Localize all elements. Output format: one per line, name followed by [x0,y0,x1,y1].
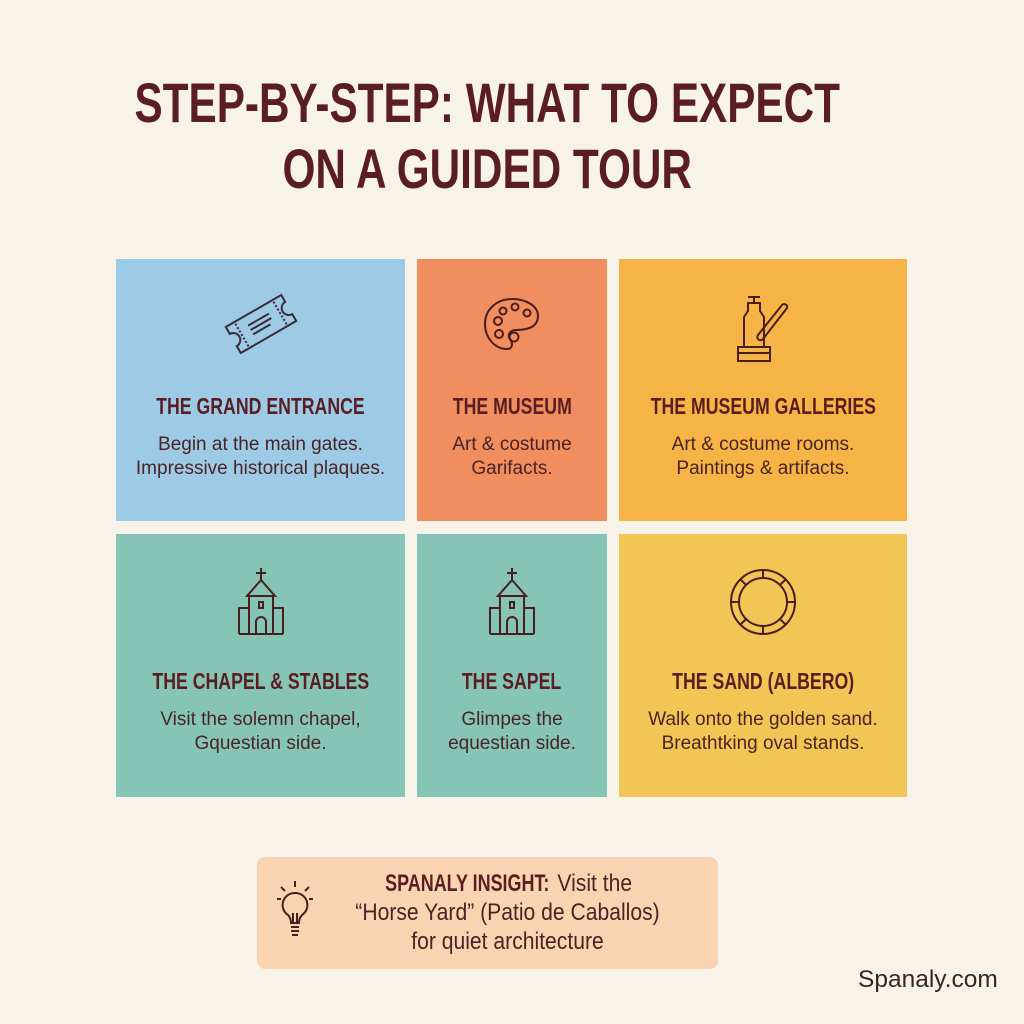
text [355,870,660,955]
title: STEP-BY-STEP: WHAT TO EXPECT [134,71,840,134]
text [648,709,878,754]
text: SPANALY INSIGHT: [385,870,549,897]
text: Visit the [557,870,632,897]
panel: chapel & stables [116,534,405,797]
text: Art & costume [452,434,572,455]
panel: museum galleries [619,259,907,521]
text: Art & costume rooms. [672,434,854,455]
text: Walk onto the golden sand. [648,709,878,730]
icon: paint tube [737,296,788,362]
icon: ticket [224,294,298,354]
text: Visit the solemn chapel, [160,709,361,730]
panel: grand entrance [116,259,405,521]
heading: THE CHAPEL & STABLES [152,668,369,694]
text [672,434,854,479]
text: Garifacts. [471,458,553,479]
heading: THE MUSEUM [452,393,572,419]
icon: chapel [238,568,284,635]
icon: arena ring [730,569,796,635]
text: Gquestian side. [194,733,327,754]
text: for quiet architecture [411,928,604,955]
text [160,709,361,754]
panel: sand [619,534,907,797]
text: “Horse Yard” (Patio de Caballos) [355,899,660,926]
text: Impressive historical plaques. [136,458,385,479]
text [136,434,385,479]
text: Paintings & artifacts. [676,458,850,479]
icon: chapel [489,568,535,635]
title [134,71,840,200]
text: Begin at the main gates. [158,434,363,455]
icon: palette [484,298,539,350]
text: Glimpes the [461,709,563,730]
panel: sapel [417,534,607,797]
text: equestian side. [448,733,576,754]
callout: insight [257,857,718,969]
heading: THE SAPEL [462,668,562,694]
heading: THE MUSEUM GALLERIES [650,393,876,419]
text [452,434,572,479]
icon: lightbulb [277,881,313,936]
title: ON A GUIDED TOUR [282,137,692,200]
heading: THE SAND (ALBERO) [672,668,854,694]
logo: Spanaly.com [858,966,998,993]
text [448,709,576,754]
panel: museum [417,259,607,521]
heading: THE GRAND ENTRANCE [156,393,365,419]
text: Breathtking oval stands. [662,733,864,754]
